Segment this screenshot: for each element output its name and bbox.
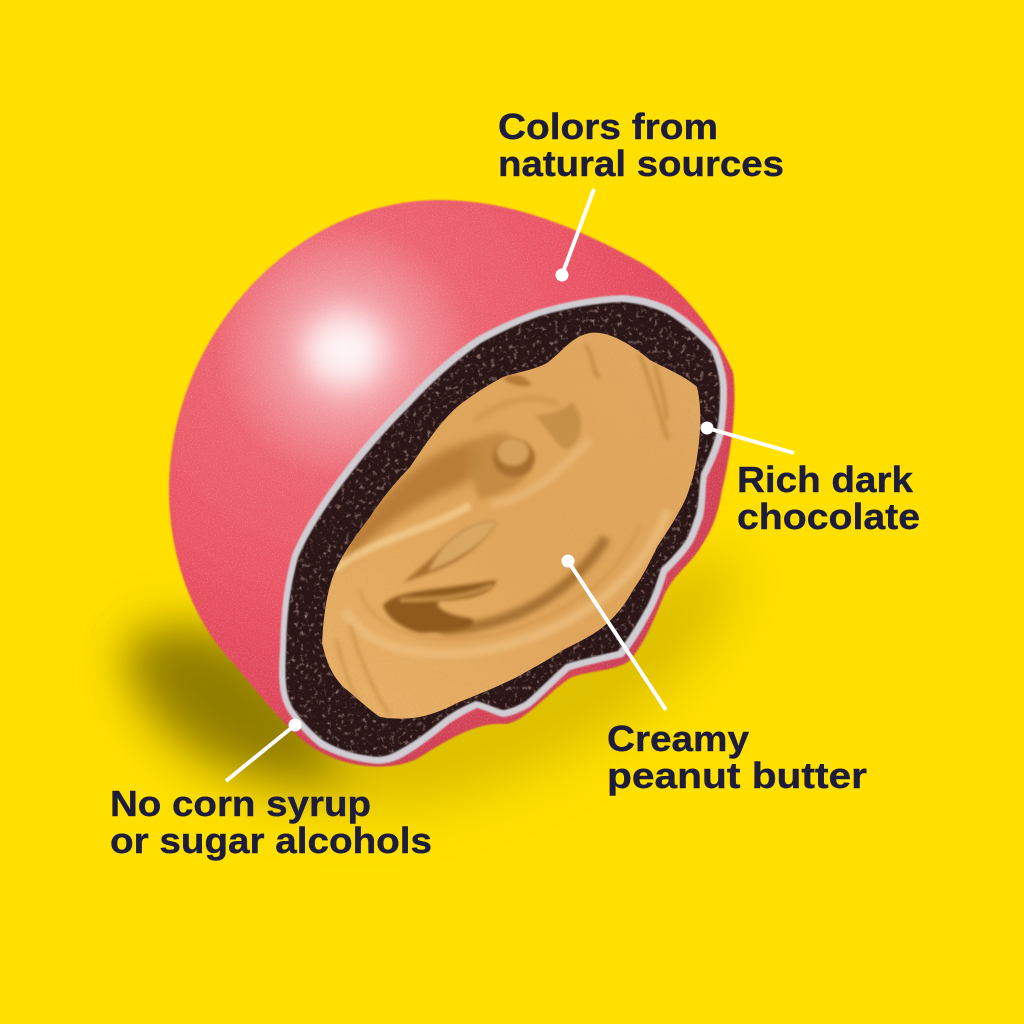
label <box>737 459 920 537</box>
callout: peanut butter <box>562 554 867 796</box>
shell highlight <box>305 314 385 386</box>
candy illustration <box>169 200 735 767</box>
main dark groove <box>383 580 497 633</box>
dot <box>700 422 714 434</box>
upper crescent almond <box>428 521 498 572</box>
leader line <box>226 725 295 781</box>
callout: chocolate <box>700 422 920 537</box>
right tail of groove <box>440 538 606 630</box>
glossy ridge <box>335 505 470 570</box>
label: Rich dark <box>737 459 914 500</box>
right crescent <box>535 402 581 450</box>
label <box>498 106 784 184</box>
label: Creamy <box>607 718 749 759</box>
label: Colors from <box>498 106 718 147</box>
dot <box>556 268 568 282</box>
label: No corn syrup <box>110 783 371 824</box>
infographic canvas <box>98 112 919 861</box>
peanut butter <box>322 332 700 719</box>
peanut butter speckle <box>330 340 698 718</box>
label: chocolate <box>737 496 920 537</box>
label: or sugar alcohols <box>110 820 432 861</box>
dot <box>288 718 302 732</box>
candy shadow <box>125 560 740 807</box>
pink candy shell <box>169 200 735 767</box>
label <box>110 783 432 861</box>
white coating edge <box>279 295 727 764</box>
dot <box>562 554 574 568</box>
lower swirl groove <box>360 525 640 639</box>
left swirl lines <box>336 625 390 715</box>
shaded pocket upper left <box>340 439 472 561</box>
shell grain <box>169 200 735 767</box>
leader line <box>562 189 594 275</box>
upper swirl band <box>475 399 560 420</box>
peanut butter base <box>322 332 700 719</box>
label: peanut butter <box>607 755 867 796</box>
label: natural sources <box>498 143 784 184</box>
round bump <box>493 438 535 477</box>
lower swirl ridge 1 <box>345 510 668 654</box>
callout: no corn syrup <box>110 718 432 861</box>
leader line <box>568 561 666 710</box>
callout: colors <box>498 106 784 282</box>
label <box>607 718 867 796</box>
top fleck <box>502 375 532 386</box>
upper crescent groove <box>403 522 497 583</box>
right streaks <box>585 345 668 440</box>
central light ridge <box>490 440 590 505</box>
dark chocolate layer <box>286 302 720 757</box>
leader line <box>707 428 794 453</box>
shaded streak around bump <box>465 433 530 500</box>
groove inner highlight <box>400 585 492 600</box>
chocolate texture <box>286 302 720 757</box>
